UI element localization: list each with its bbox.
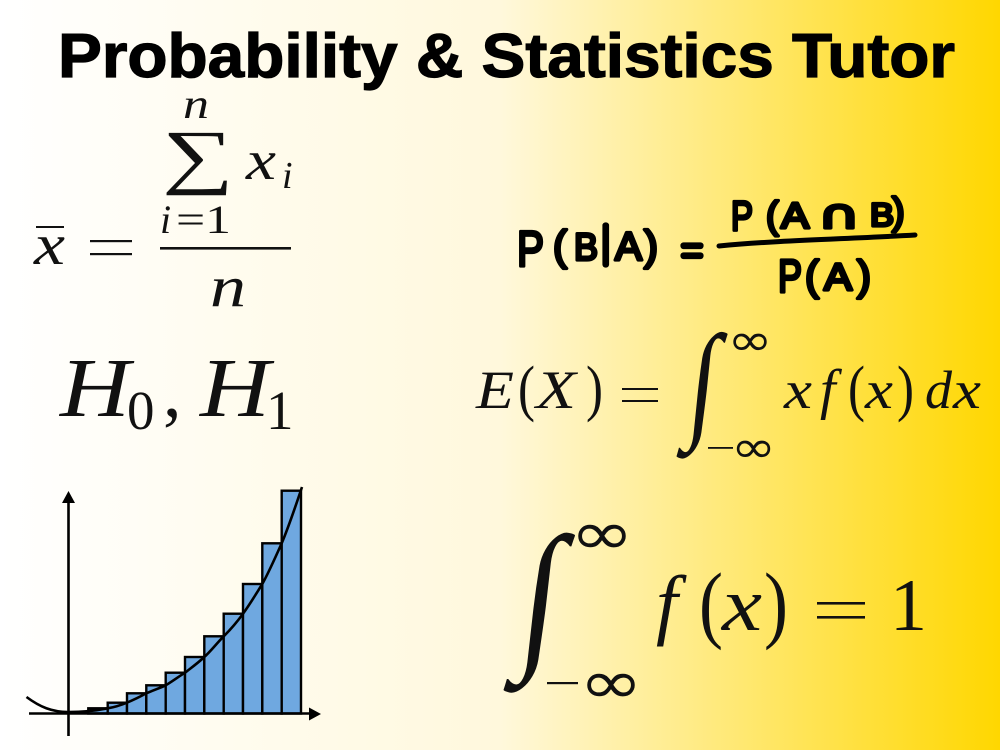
chart: bars under curve xyxy=(26,487,321,736)
formula: handwritten conditional probability: A xyxy=(615,225,642,269)
formula: expected value: ) xyxy=(897,355,914,423)
formula: hypotheses: H xyxy=(199,342,275,435)
formula: expected value: x xyxy=(952,360,981,420)
formula: sample mean: n xyxy=(210,254,246,319)
formula: handwritten conditional probability: ( xyxy=(766,195,779,237)
formula: sample mean xyxy=(33,82,293,319)
formula: handwritten conditional probability: A xyxy=(824,257,853,299)
formula: expected value: ∞ xyxy=(728,315,772,366)
formula: normalisation integral: f xyxy=(656,560,687,647)
curve xyxy=(26,487,302,712)
formula: handwritten conditional probability: P xyxy=(517,221,544,277)
formula: normalisation integral: ∞ xyxy=(579,648,643,718)
formula: expected value: ( xyxy=(848,355,865,423)
formula: normalisation integral: ∫ xyxy=(502,505,579,693)
formula: normalisation integral xyxy=(502,499,927,718)
formula: expected value: ) xyxy=(586,355,603,423)
formula: hypotheses xyxy=(59,342,294,441)
formula: expected value: ∫ xyxy=(675,310,730,460)
formula: normalisation integral: 1 xyxy=(890,565,927,647)
formula: handwritten conditional probability: ( xyxy=(553,222,567,269)
title: Probability & Statistics Tutor xyxy=(58,22,955,91)
formula: normalisation integral: ( xyxy=(699,555,723,651)
formula: handwritten conditional probability: ) xyxy=(857,252,871,299)
formula: sample mean: =1 xyxy=(176,197,231,242)
formula: sample mean: x xyxy=(245,130,276,192)
formula: handwritten conditional probability: ) xyxy=(644,222,658,269)
formula: expected value: x xyxy=(783,360,812,420)
formula: sample mean: i xyxy=(282,155,293,197)
formula: expected value: x xyxy=(864,360,893,420)
formula: expected value: d xyxy=(925,360,953,420)
arrowheads xyxy=(62,491,321,720)
formula: normalisation integral: x xyxy=(721,563,762,647)
formula: handwritten conditional probability: ) xyxy=(892,191,905,233)
formula: handwritten conditional probability: B xyxy=(870,197,894,233)
axes xyxy=(29,500,310,736)
formula: handwritten conditional probability: ( xyxy=(805,252,819,299)
formula: expected value: X xyxy=(534,360,578,420)
formula: sample mean: ∑ xyxy=(162,116,234,196)
formula: handwritten conditional probability: ∩ xyxy=(818,192,860,238)
histogram bars xyxy=(88,491,301,714)
formula: hypotheses: H xyxy=(59,342,135,435)
formula: handwritten conditional probability: P xyxy=(778,250,802,302)
formula: hypotheses: 1 xyxy=(266,380,294,441)
formula: expected value: f xyxy=(820,359,843,421)
formula: hypotheses: 0 xyxy=(127,380,154,441)
formula: sample mean: x xyxy=(33,212,65,277)
formula: hypotheses: , xyxy=(163,351,182,433)
formula: expected value: E xyxy=(475,360,514,420)
formula: sample mean: n xyxy=(183,82,209,128)
formula: sample mean: i xyxy=(160,197,171,242)
formula: handwritten conditional probability: P xyxy=(731,192,753,239)
formula: expected value xyxy=(475,310,981,473)
formula: expected value: ( xyxy=(518,355,535,423)
formula: normalisation integral: ∞ xyxy=(570,499,634,569)
formula: handwritten conditional probability: A xyxy=(781,195,809,236)
formula: normalisation integral: ) xyxy=(764,555,788,651)
formula: expected value: ∞ xyxy=(731,422,776,473)
formula: handwritten conditional probability xyxy=(517,191,915,302)
formula: handwritten conditional probability: B xyxy=(574,227,598,269)
